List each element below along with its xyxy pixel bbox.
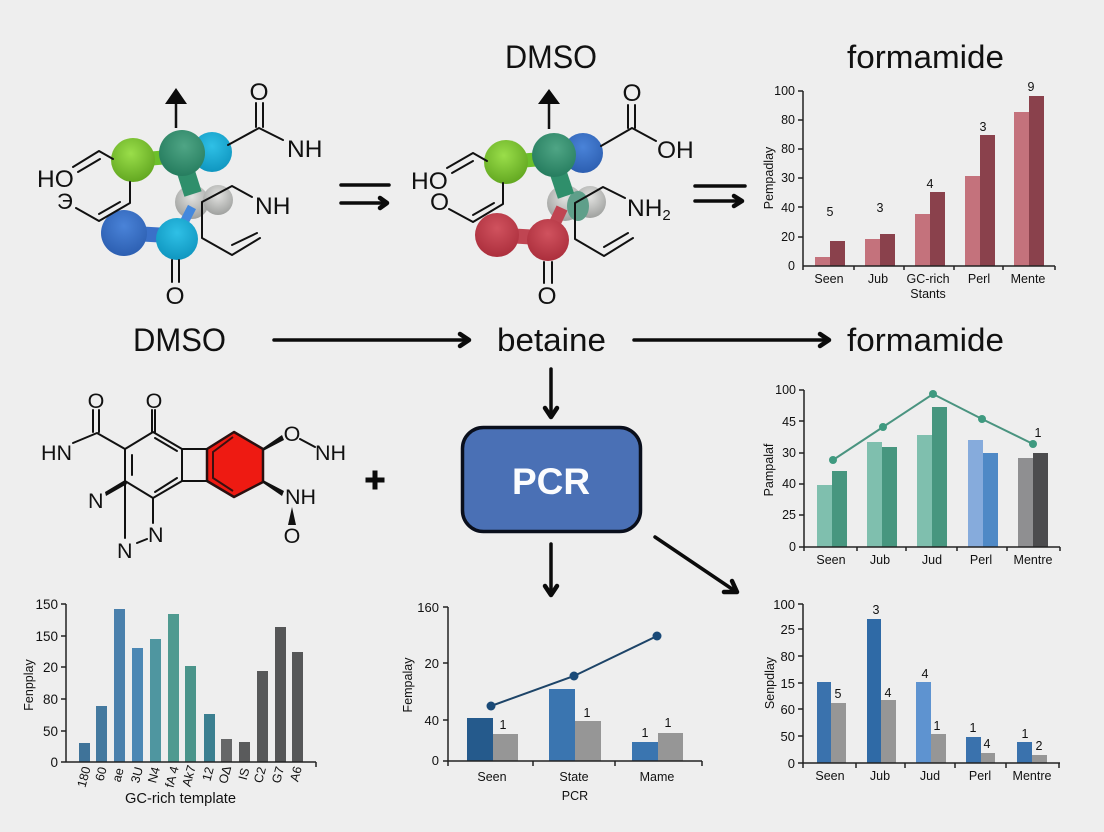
PCR box — [462, 428, 640, 532]
combo chart: bottom centre PCR: State — [559, 770, 589, 784]
combo chart: middle right: 25 — [782, 508, 796, 522]
combo chart: bottom centre PCR: 160 — [417, 600, 439, 615]
bar chart: GC-rich template: 0 — [50, 755, 58, 770]
bar chart: GC-rich template: 60 — [93, 765, 110, 782]
combo chart: middle right: 100 — [775, 383, 796, 397]
bar chart: GC-rich template: IS — [236, 766, 252, 781]
combo chart: bottom centre PCR: 0 — [432, 753, 439, 768]
molecule: fused ring skeletal structure: O — [284, 422, 300, 446]
molecule: ball-and-stick structure 1: O — [249, 79, 269, 106]
combo chart: middle right: Mentre — [1014, 553, 1052, 567]
molecule: fused ring skeletal structure: NH — [285, 485, 316, 509]
bar chart: bottom right: Mentre — [1013, 769, 1051, 783]
bar chart: top right: 9 — [1028, 80, 1035, 94]
bar chart: top right: 3 — [877, 201, 884, 215]
molecule: ball-and-stick structure 2: 2 — [662, 207, 671, 224]
bar chart: GC-rich template: 3U — [128, 765, 146, 784]
bar chart: bottom right: Perl — [969, 769, 991, 783]
arrow: PCR down — [545, 544, 557, 595]
bar chart: GC-rich template: O∆ — [216, 764, 234, 785]
molecule: fused ring skeletal structure: NH — [315, 441, 346, 465]
bar chart: top right: 3 — [980, 120, 987, 134]
bar chart: top right: Jub — [868, 272, 888, 286]
bar chart: bottom right: 1 — [970, 721, 977, 735]
bar chart: GC-rich template: Ak7 — [180, 764, 199, 788]
combo chart: bottom centre PCR: 1 — [665, 716, 672, 730]
molecule: ball-and-stick structure 1: O — [165, 283, 185, 310]
combo chart: bottom centre PCR: PCR — [562, 789, 588, 803]
bar chart: bottom right: 5 — [835, 687, 842, 701]
combo chart: middle right: Jub — [870, 553, 890, 567]
bar chart: bottom right: 60 — [781, 702, 795, 717]
combo chart: bottom centre PCR: 1 — [642, 726, 649, 740]
combo chart: middle right: Seen — [816, 553, 846, 567]
bar chart: bottom right: 2 — [1036, 739, 1043, 753]
molecule: ball-and-stick structure 1 — [37, 79, 322, 310]
molecule: fused ring skeletal structure: O — [146, 389, 162, 413]
bar chart: GC-rich template: 150 — [35, 629, 58, 644]
arrow: betaine down to PCR — [545, 369, 557, 417]
bar chart: GC-rich template: fA 4 — [163, 765, 182, 789]
bar chart: GC-rich template: 80 — [43, 692, 58, 707]
bar chart: bottom right: 80 — [781, 649, 795, 664]
molecule: ball-and-stick structure 2: O — [622, 80, 642, 107]
label: betaine: betaine — [497, 322, 606, 358]
arrow: equilibrium 1 — [341, 185, 389, 208]
molecule: ball-and-stick structure 2: NH — [627, 195, 662, 222]
molecule: fused ring skeletal structure: N — [88, 489, 104, 513]
bar chart: GC-rich template — [22, 597, 316, 807]
combo chart: middle right: Jud — [922, 553, 942, 567]
combo chart: bottom centre PCR: 1 — [584, 706, 591, 720]
label: DMSO: DMSO — [133, 322, 226, 358]
molecule: fused ring skeletal structure: N — [117, 539, 133, 563]
combo chart: bottom centre PCR: Mame — [640, 770, 674, 784]
combo chart: middle right: 30 — [782, 446, 796, 460]
PCR box: PCR — [512, 461, 590, 502]
bar chart: bottom right: 1 — [934, 719, 941, 733]
bar chart: top right: 80 — [781, 142, 795, 156]
bar chart: bottom right: 50 — [781, 729, 795, 744]
arrow: equilibrium 2 — [695, 186, 745, 206]
bar chart: bottom right — [763, 597, 1060, 783]
molecule: fused ring skeletal structure: O — [88, 389, 104, 413]
bar chart: top right — [762, 80, 1055, 301]
bar chart: bottom right: 1 — [1022, 727, 1029, 741]
bar chart: top right: GC-rich — [906, 272, 950, 286]
bar chart: top right: Pempadlay — [762, 146, 776, 209]
molecule: fused ring skeletal structure: O — [284, 524, 300, 548]
label: formamide: formamide — [847, 322, 1004, 358]
bar chart: GC-rich template: 20 — [43, 660, 58, 675]
bar chart: top right: 4 — [927, 177, 934, 191]
combo chart: middle right: 45 — [782, 415, 796, 429]
bar chart: top right: 40 — [781, 201, 795, 215]
bar chart: bottom right: 4 — [922, 667, 929, 681]
molecule: fused ring skeletal structure: N — [148, 523, 164, 547]
bar chart: top right: 100 — [774, 84, 795, 98]
bar chart: bottom right: 0 — [788, 756, 795, 771]
combo chart: middle right: 1 — [1035, 426, 1042, 440]
bar chart: bottom right: 15 — [781, 676, 795, 691]
molecule: ball-and-stick structure 2: OH — [657, 137, 694, 164]
bar chart: top right: Seen — [814, 272, 844, 286]
bar chart: GC-rich template: Fenpplay — [22, 659, 36, 711]
molecule: ball-and-stick structure 1: NH — [255, 193, 290, 220]
bar chart: GC-rich template: N4 — [145, 765, 163, 784]
combo chart: bottom centre PCR: 1 — [500, 718, 507, 732]
bar chart: GC-rich template: GC-rich template — [125, 791, 236, 807]
bar chart: top right: 5 — [827, 205, 834, 219]
heading: formamide top: formamide — [847, 39, 1004, 75]
bar chart: top right: Mente — [1011, 272, 1045, 286]
arrow: betaine to formamide — [634, 334, 829, 346]
bar chart: top right: 0 — [788, 259, 795, 273]
molecule: ball-and-stick structure 1: HO — [37, 166, 74, 193]
molecule: ball-and-stick structure 2: HO — [411, 168, 448, 195]
bar chart: GC-rich template: ae — [110, 766, 127, 783]
bar chart: bottom right: 3 — [873, 603, 880, 617]
combo chart: middle right — [762, 383, 1060, 567]
combo chart: bottom centre PCR — [401, 600, 702, 803]
bar chart: GC-rich template: 180 — [75, 765, 94, 789]
bar chart: top right: 20 — [781, 230, 795, 244]
bar chart: GC-rich template: A6 — [287, 765, 305, 783]
molecule: ball-and-stick structure 1: Э — [57, 189, 73, 214]
bar chart: GC-rich template: C2 — [251, 765, 269, 784]
bar chart: bottom right: 25 — [781, 622, 795, 637]
molecule: ball-and-stick structure 2 — [411, 80, 694, 310]
combo chart: bottom centre PCR: 40 — [425, 713, 439, 728]
combo chart: middle right: 40 — [782, 477, 796, 491]
bar chart: GC-rich template: 12 — [200, 765, 217, 782]
combo chart: middle right: Perl — [970, 553, 992, 567]
molecule: fused ring skeletal structure — [41, 389, 346, 563]
bar chart: top right: Perl — [968, 272, 990, 286]
bar chart: bottom right: Jub — [870, 769, 890, 783]
arrow: PCR diagonal — [655, 537, 737, 592]
bar chart: top right: 30 — [781, 171, 795, 185]
bar chart: top right: Stants — [910, 287, 946, 301]
arrow: DMSO to betaine — [274, 334, 469, 346]
combo chart: middle right: 0 — [789, 540, 796, 554]
molecule: ball-and-stick structure 2: O — [537, 283, 557, 310]
bar chart: bottom right: Jud — [920, 769, 940, 783]
bar chart: GC-rich template: 150 — [35, 597, 58, 612]
combo chart: bottom centre PCR: Fempalay — [401, 657, 415, 712]
bar chart: bottom right: 100 — [773, 597, 795, 612]
bar chart: GC-rich template: G7 — [269, 765, 287, 785]
combo chart: bottom centre PCR: Seen — [477, 770, 507, 784]
molecule: ball-and-stick structure 2: O — [430, 189, 449, 216]
bar chart: bottom right: 4 — [984, 737, 991, 751]
molecule: fused ring skeletal structure: HN — [41, 441, 72, 465]
combo chart: bottom centre PCR: 20 — [425, 656, 439, 671]
heading: DMSO top: DMSO — [505, 39, 597, 75]
bar chart: GC-rich template: 50 — [43, 724, 58, 739]
bar chart: top right: 80 — [781, 113, 795, 127]
bar chart: bottom right: Senpdlay — [763, 656, 777, 709]
bar chart: bottom right: 4 — [885, 686, 892, 700]
combo chart: middle right: Pampalaf — [762, 443, 776, 496]
bar chart: bottom right: Seen — [815, 769, 845, 783]
molecule: ball-and-stick structure 1: NH — [287, 136, 322, 163]
icon: plus sign — [366, 470, 384, 490]
